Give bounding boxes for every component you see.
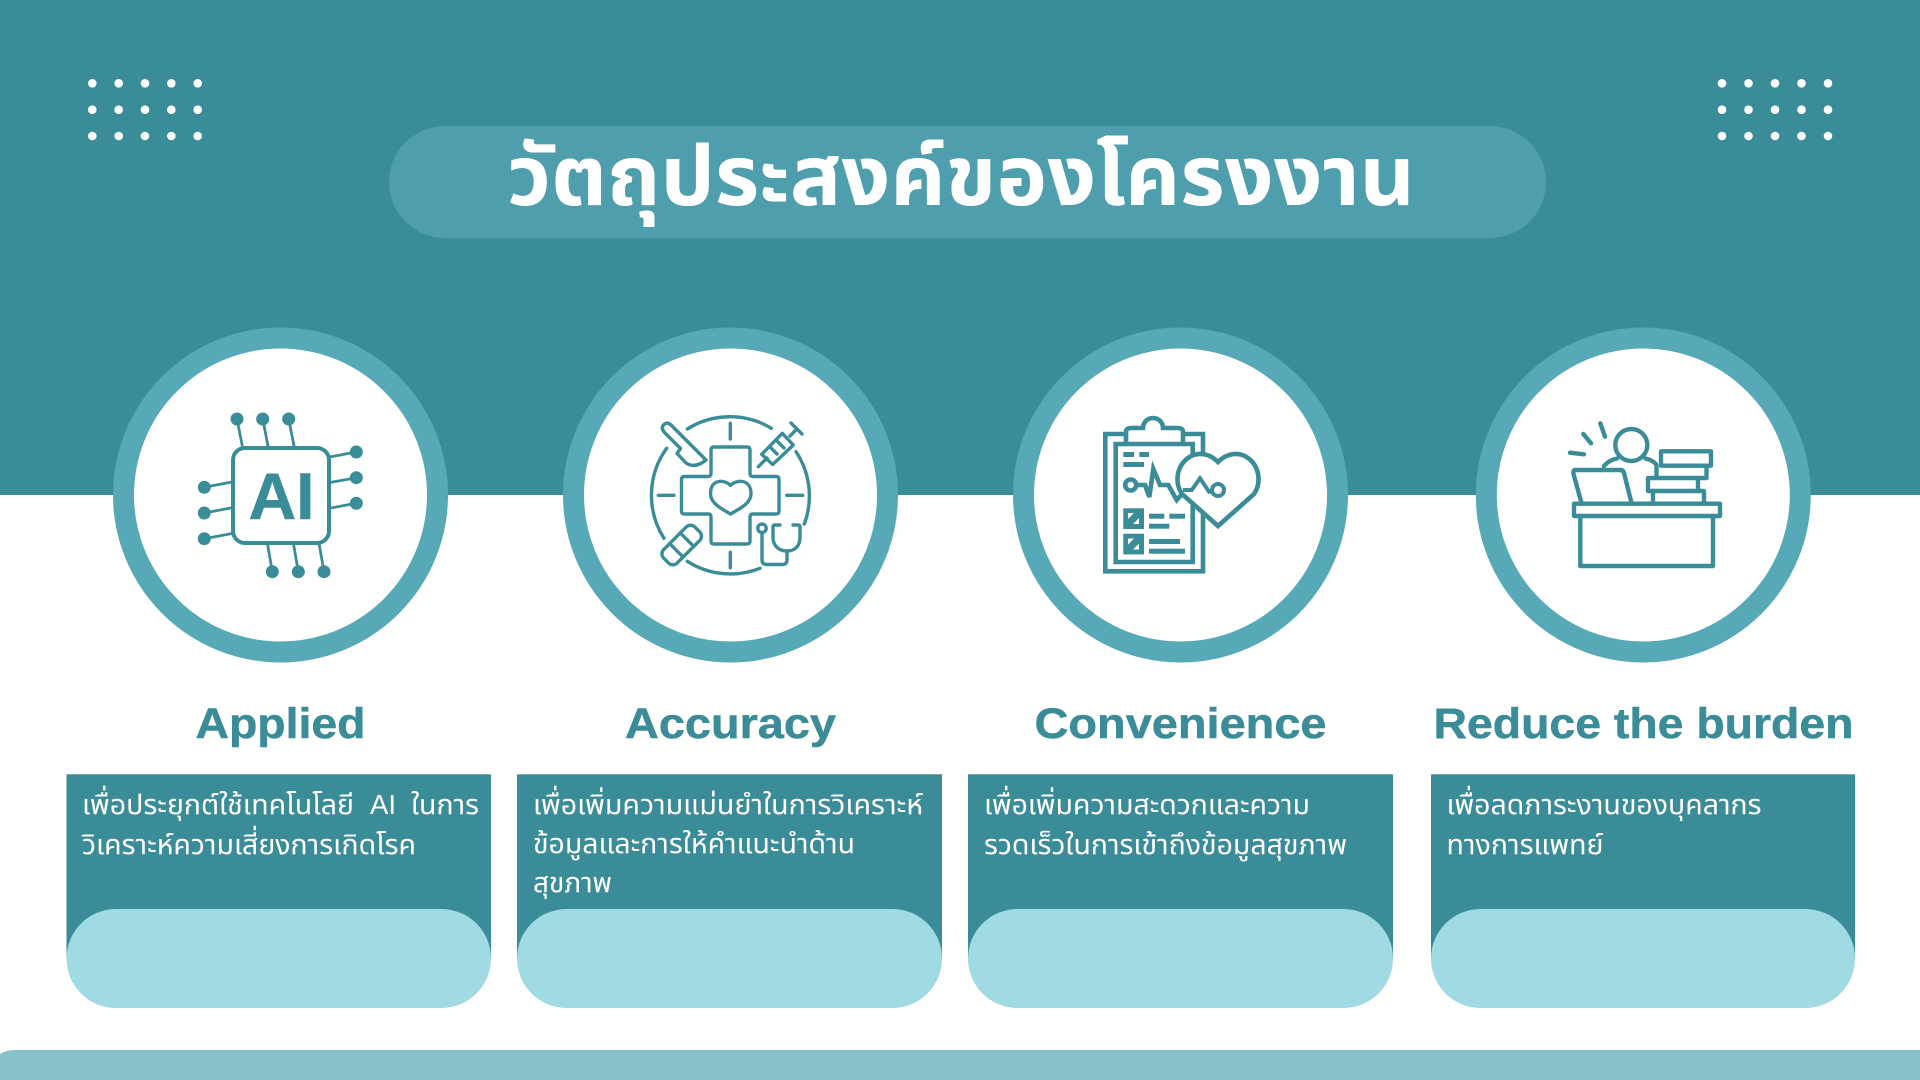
card: convenience: [968, 774, 1393, 1008]
text: applied description: วิเคราะห์ความเสี่ยงการเกิดโรค: [81, 825, 416, 860]
text: accuracy description: ข้อมูลและการให้คำแนะนำด้าน: [533, 828, 855, 861]
heading: reduce the burden: Reduce the burden: [1434, 700, 1854, 748]
text: accuracy description: สุขภาพ: [533, 867, 612, 899]
icon: AI chip: AI: [248, 459, 314, 533]
text: convenience description: รวดเร็วในการเข้าถึงข้อมูลสุขภาพ: [984, 829, 1347, 862]
decorative dots: top left: [88, 79, 202, 140]
icon: AI chip: [198, 412, 363, 578]
heading: accuracy: Accuracy: [625, 700, 836, 748]
text: accuracy description: [533, 785, 924, 899]
title: [389, 126, 1546, 238]
text: accuracy description: เพื่อเพิ่มความแม่นยำในการวิเคราะห์: [533, 785, 924, 820]
panel: accuracy circle with medical icon: [574, 338, 888, 652]
icon: worker at desk: [1570, 423, 1720, 566]
card: reduce the burden: [1431, 774, 1855, 1008]
text: reduce the burden description: ทางการแพทย์: [1446, 829, 1604, 860]
text: applied description: AI: [370, 789, 396, 820]
icon: clipboard and heart: [1105, 418, 1259, 571]
icon: medical cross and tools: [651, 417, 809, 574]
footer band: [0, 1050, 1920, 1080]
text: convenience description: [984, 785, 1347, 862]
text: reduce the burden description: เพื่อลดภาระงานของบุคลากร: [1446, 785, 1762, 821]
panel: applied circle with AI chip icon: [124, 338, 438, 652]
panel: convenience circle with clipboard icon: [1024, 338, 1338, 652]
text: applied description: ในการ: [411, 789, 479, 820]
text: reduce the burden description: [1446, 785, 1762, 860]
decorative dots: top right: [1718, 79, 1832, 140]
text: applied description: เพื่อประยุกต์ใช้เทคโนโลยี: [82, 785, 354, 821]
heading: convenience: Convenience: [1034, 700, 1326, 748]
text: convenience description: เพื่อเพิ่มความสะดวกและความ: [984, 785, 1310, 820]
panel: reduce the burden circle with desk icon: [1486, 338, 1800, 652]
card: applied: [66, 774, 491, 1008]
text: applied description: [81, 785, 479, 860]
card: accuracy: [517, 774, 942, 1008]
heading: applied: Applied: [196, 700, 366, 748]
title: วัตถุประสงค์ของโครงงาน: [507, 129, 1415, 227]
